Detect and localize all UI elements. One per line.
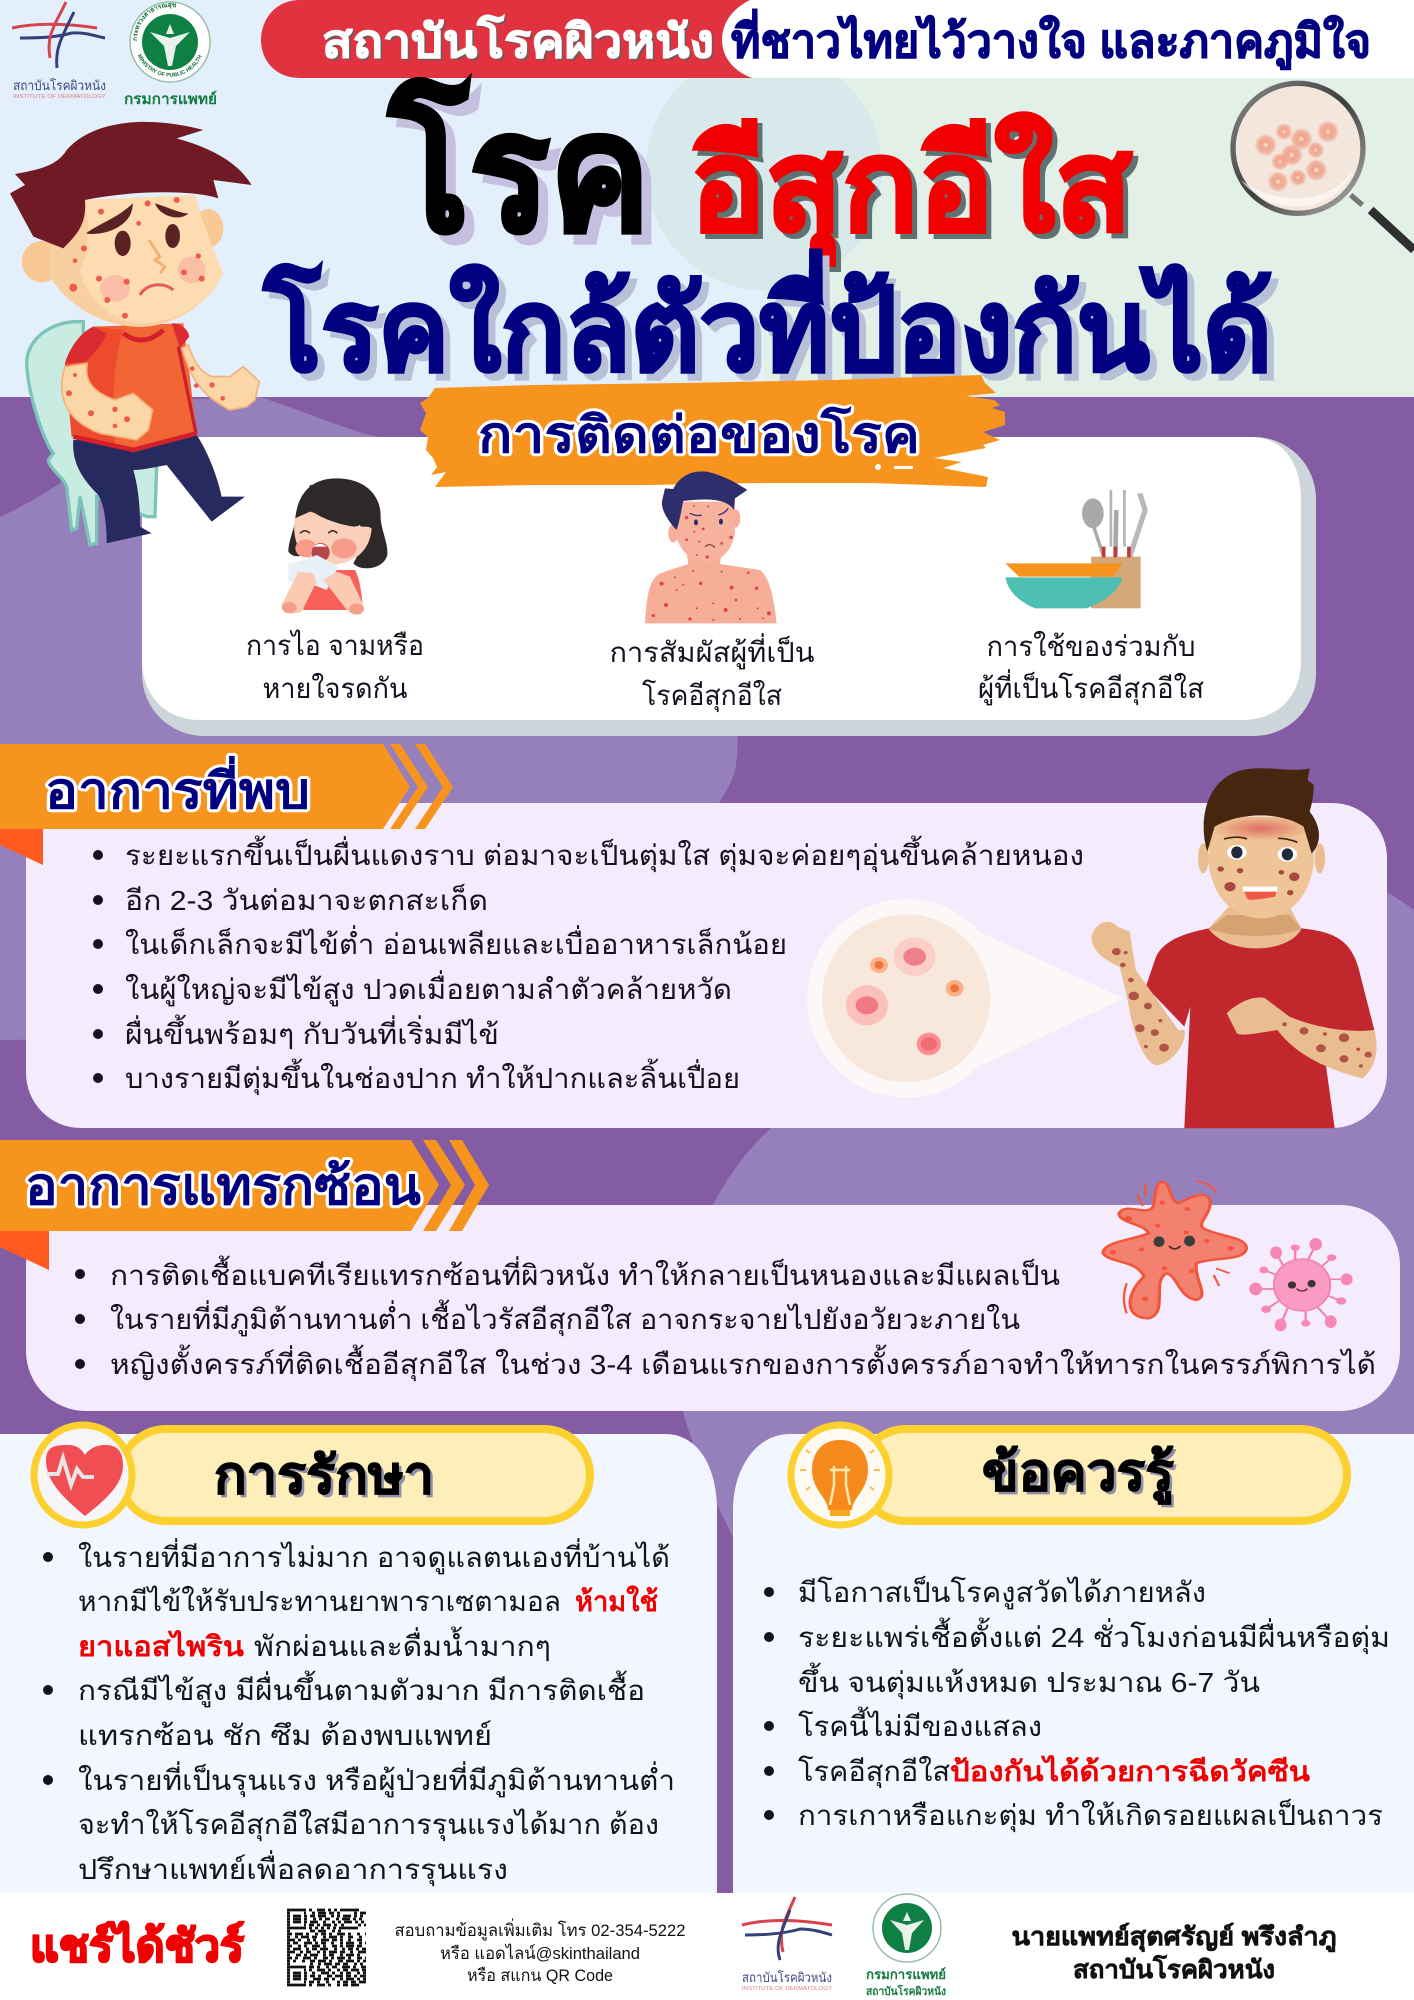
label: coughing: หายใจรดกัน bbox=[262, 672, 408, 704]
label: sharing items bbox=[978, 630, 1204, 706]
top banner bbox=[261, 0, 1414, 78]
icon: magnifier bbox=[1233, 83, 1414, 250]
title: chickenpox: อีสุกอีใส bbox=[695, 118, 1137, 271]
top banner: สถาบันโรคผิวหนัง bbox=[322, 14, 714, 67]
knowledge list: มีโอกาสเป็นโรคงูสวัดได้ภายหลัง bbox=[798, 1575, 1206, 1610]
symptom list bbox=[93, 835, 1084, 1096]
symptom list: ในผู้ใหญ่จะมีไข้สูง ปวดเมื่อยตามลำตัวคล้ายหวัด bbox=[125, 970, 732, 1007]
signature bbox=[1012, 1922, 1336, 1984]
symptom list: ระยะแรกขึ้นเป็นผื่นแดงราบ ต่อมาจะเป็นตุ่มใส ตุ่มจะค่อยๆอุ่นขึ้นคล้ายหนอง bbox=[125, 835, 1084, 873]
footer logo: institute: INSTITUTE OF DERMATOLOGY bbox=[742, 1986, 832, 1992]
footer logo: institute bbox=[742, 1897, 832, 1992]
top banner: สถาบันโรคผิวหนัง bbox=[324, 16, 716, 69]
title: disease: โรค bbox=[387, 78, 650, 265]
panel: complications bbox=[0, 1140, 1400, 1411]
treatment list: จะทำให้โรคอีสุกอีใสมีอาการรุนแรงได้มาก ต้อง bbox=[78, 1808, 659, 1842]
knowledge list: โรคนี้ไม่มีของแสลง bbox=[798, 1706, 1042, 1742]
treatment list: หากมีไข้ให้รับประทานยาพาราเซตามอล bbox=[78, 1585, 561, 1617]
logo: ministry of public health: กรมการแพทย์ bbox=[124, 90, 217, 108]
panel: should know bbox=[733, 1425, 1414, 1893]
heading pill: treatment: การรักษา bbox=[214, 1447, 434, 1505]
footer logo: ministry bbox=[866, 1894, 946, 1998]
subtitle: โรคใกล้ตัวที่ป้องกันได้ bbox=[263, 250, 1272, 395]
treatment list: ในรายที่มีอาการไม่มาก อาจดูแลตนเองที่บ้านได้ bbox=[78, 1538, 670, 1575]
label: sharing items: ผู้ที่เป็นโรคอีสุกอีใส bbox=[978, 669, 1204, 706]
icon: orange germ bbox=[1103, 1181, 1246, 1318]
heading: complications: อาการแทรกซ้อน bbox=[25, 1158, 421, 1216]
footer logo: ministry: สถาบันโรคผิวหนัง bbox=[866, 1984, 946, 1998]
symptom list: ในเด็กเล็กจะมีไข้ต่ำ อ่อนเพลียและเบื่ออาหารเล็กน้อย bbox=[125, 925, 787, 960]
panel: symptoms bbox=[0, 744, 1387, 1128]
contact text: หรือ สแกน QR Code bbox=[467, 1966, 613, 1985]
footer bbox=[0, 1893, 1414, 2000]
label: contact: โรคอีสุกอีใส bbox=[642, 679, 782, 713]
knowledge list: โรคอีสุกอีใส bbox=[798, 1755, 950, 1789]
treatment list: แทรกซ้อน ชัก ซึม ต้องพบแพทย์ bbox=[78, 1720, 492, 1751]
heading pill: should know: ข้อควรรู้ bbox=[985, 1447, 1177, 1508]
top banner: ที่ชาวไทยไว้วางใจ และภาคภูมิใจ bbox=[731, 9, 1371, 70]
complication list: หญิงตั้งครรภ์ที่ติดเชื้ออีสุกอีใส ในช่วง 3-4 เดือนแรกของการตั้งครรภ์อาจทำให้ทารกในครรภ์พิการได้ bbox=[110, 1344, 1376, 1382]
complication list bbox=[75, 1255, 1376, 1382]
treatment list bbox=[43, 1538, 675, 1887]
contact text: สอบถามข้อมูลเพิ่มเติม โทร 02-354-5222 bbox=[394, 1918, 686, 1941]
logo: ministry of public health: กระทรวงสาธารณสุข bbox=[133, 3, 176, 41]
knowledge list bbox=[764, 1575, 1390, 1833]
logo: institute of dermatology: INSTITUTE OF DERMATOLOGY bbox=[13, 94, 106, 100]
title: chickenpox: อีสุกอีใส bbox=[690, 113, 1132, 266]
knowledge list: การเกาหรือแกะตุ่ม ทำให้เกิดรอยแผลเป็นถาวร bbox=[798, 1798, 1383, 1833]
QR code bbox=[287, 1909, 366, 1988]
treatment list: ห้ามใช้ bbox=[575, 1585, 658, 1617]
contact text bbox=[394, 1918, 686, 1985]
complication list: ในรายที่มีภูมิต้านทานต่ำ เชื้อไวรัสอีสุกอีใส อาจกระจายไปยังอวัยวะภายใน bbox=[110, 1299, 1020, 1337]
subtitle: โรคใกล้ตัวที่ป้องกันได้ bbox=[270, 257, 1279, 402]
label: contact: การสัมผัสผู้ที่เป็น bbox=[610, 633, 814, 670]
heading pill: should know: ข้อควรรู้ bbox=[982, 1444, 1174, 1505]
icon: shared dishes and cutlery bbox=[1005, 490, 1145, 608]
icon: heart bbox=[34, 1425, 132, 1525]
footer logo: institute: สถาบันโรคผิวหนัง bbox=[742, 1970, 832, 1985]
illustration: man with rash in red shirt bbox=[1091, 768, 1377, 1128]
logo: institute of dermatology bbox=[12, 2, 106, 100]
heading: symptoms: อาการที่พบ bbox=[45, 756, 310, 819]
logo: ministry of public health: MINISTRY OF PUBLIC HEALTH bbox=[138, 54, 202, 77]
illustration: skin rash close-up bbox=[807, 899, 1124, 1098]
panel: transmission card bbox=[142, 437, 1316, 736]
heading pill: treatment bbox=[120, 1429, 590, 1521]
label: sharing items: การใช้ของร่วมกับ bbox=[986, 630, 1196, 662]
complication list: การติดเชื้อแบคทีเรียแทรกซ้อนที่ผิวหนัง ทำให้กลายเป็นหนองและมีแผลเป็น bbox=[110, 1255, 1060, 1291]
footer logo: ministry: กรมการแพทย์ bbox=[866, 1967, 946, 1982]
signature: นายแพทย์สุตศรัญย์ พรึงลำภู bbox=[1012, 1922, 1336, 1953]
slogan: แชร์ได้ชัวร์ bbox=[30, 1920, 244, 1971]
treatment list: กรณีมีไข้สูง มีผื่นขึ้นตามตัวมาก มีการติดเชื้อ bbox=[78, 1670, 645, 1708]
heading pill: should know bbox=[860, 1429, 1347, 1521]
contact text: หรือ แอดไลน์@skinthailand bbox=[440, 1943, 640, 1963]
logo: ministry of public health bbox=[124, 1, 217, 108]
illustration: sick boy on chair bbox=[10, 122, 259, 545]
knowledge list: ขึ้น จนตุ่มแห้งหมด ประมาณ 6-7 วัน bbox=[798, 1662, 1260, 1700]
label: coughing bbox=[246, 630, 424, 704]
icon: light bulb bbox=[791, 1425, 889, 1525]
treatment list: พักผ่อนและดื่มน้ำมากๆ bbox=[254, 1626, 551, 1662]
brush banner: transmission bbox=[420, 375, 1005, 487]
logo: institute of dermatology: สถาบันโรคผิวหนัง bbox=[13, 78, 106, 93]
symptom list: ผื่นขึ้นพร้อมๆ กับวันที่เริ่มมีไข้ bbox=[125, 1014, 499, 1050]
treatment list: ในรายที่เป็นรุนแรง หรือผู้ป่วยที่มีภูมิต้านทานต่ำ bbox=[78, 1761, 675, 1798]
heading pill: treatment: การรักษา bbox=[217, 1450, 437, 1508]
label: contact bbox=[610, 633, 814, 713]
icon: pink virus bbox=[1249, 1238, 1353, 1331]
knowledge list: ป้องกันได้ด้วยการฉีดวัคซีน bbox=[950, 1755, 1310, 1787]
brush banner: transmission: การติดต่อของโรค bbox=[478, 405, 920, 463]
treatment list: ยาแอสไพริน bbox=[78, 1630, 244, 1662]
label: coughing: การไอ จามหรือ bbox=[246, 630, 424, 661]
icon: man with rash on shoulders bbox=[645, 471, 777, 623]
symptom list: อีก 2-3 วันต่อมาจะตกสะเก็ด bbox=[125, 883, 488, 916]
knowledge list: ระยะแพร่เชื้อตั้งแต่ 24 ชั่วโมงก่อนมีผื่นหรือตุ่ม bbox=[798, 1617, 1390, 1655]
title: disease: โรค bbox=[397, 88, 660, 275]
panel: treatment bbox=[0, 1425, 717, 1893]
treatment list: ปรึกษาแพทย์เพื่อลดอาการรุนแรง bbox=[78, 1850, 508, 1887]
icon: coughing girl bbox=[282, 478, 387, 615]
signature: สถาบันโรคผิวหนัง bbox=[1073, 1954, 1275, 1984]
symptom list: บางรายมีตุ่มขึ้นในช่องปาก ทำให้ปากและลิ้นเปื่อย bbox=[125, 1058, 740, 1096]
